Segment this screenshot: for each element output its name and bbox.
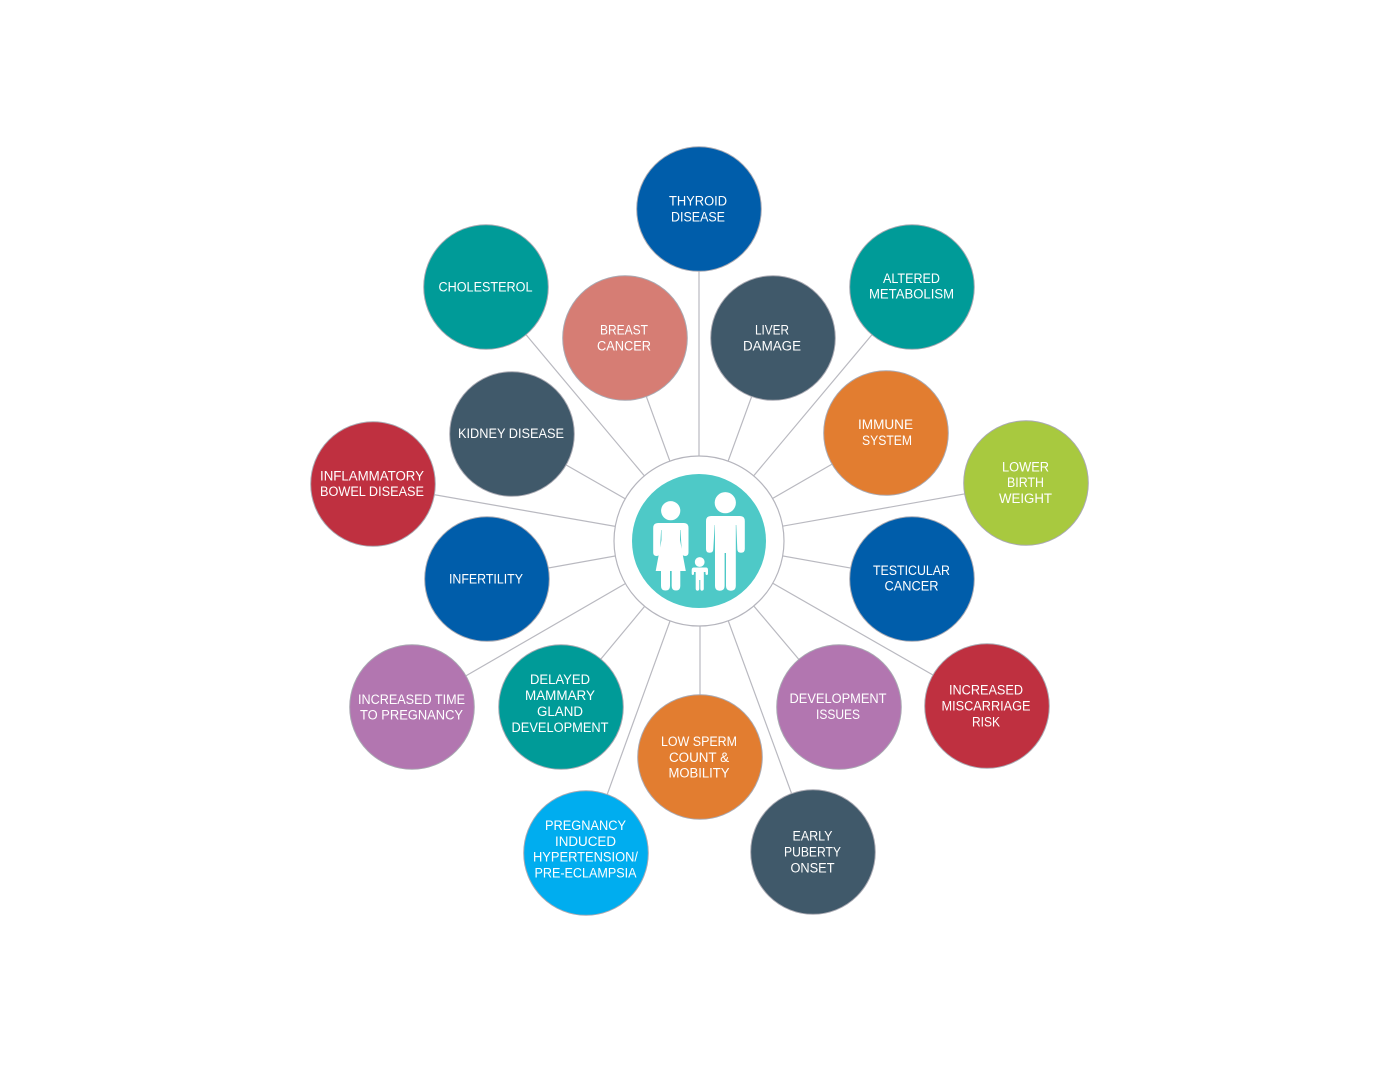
node: altered metabolism bbox=[850, 225, 974, 349]
node: increased miscarriage risk: MISCARRIAGE bbox=[942, 698, 1030, 714]
node: increased miscarriage risk: INCREASED bbox=[949, 682, 1023, 698]
node: delayed mammary gland development: GLAND bbox=[537, 704, 583, 720]
node: inflammatory bowel disease: BOWEL DISEASE bbox=[320, 484, 424, 500]
node: delayed mammary gland development: DEVELOPMENT bbox=[512, 720, 609, 736]
node: pregnancy induced hypertension / pre-eclampsia: PRE-ECLAMPSIA bbox=[534, 866, 637, 882]
node: testicular cancer: TESTICULAR bbox=[873, 563, 950, 579]
node: breast cancer: BREAST bbox=[600, 322, 648, 338]
node: immune system: SYSTEM bbox=[862, 433, 912, 449]
node: increased time to pregnancy bbox=[350, 645, 474, 769]
node: thyroid disease: DISEASE bbox=[671, 210, 725, 226]
node: altered metabolism: METABOLISM bbox=[869, 286, 954, 302]
node: cholesterol: CHOLESTEROL bbox=[438, 280, 533, 296]
node: breast cancer bbox=[563, 276, 687, 400]
node: low sperm count and mobility: LOW SPERM bbox=[661, 734, 737, 750]
node: development issues bbox=[777, 645, 901, 769]
node: inflammatory bowel disease: INFLAMMATORY bbox=[320, 468, 424, 484]
node: pregnancy induced hypertension / pre-eclampsia bbox=[524, 791, 648, 915]
node: increased time to pregnancy: INCREASED TIME bbox=[358, 692, 465, 708]
icon: woman bbox=[653, 501, 688, 590]
connector lines bbox=[373, 209, 1026, 853]
node: early puberty onset: PUBERTY bbox=[784, 844, 841, 860]
node: cholesterol bbox=[424, 225, 548, 349]
node: development issues: DEVELOPMENT bbox=[790, 691, 887, 707]
node: kidney disease bbox=[450, 372, 574, 496]
node: infertility bbox=[425, 517, 549, 641]
central hub bbox=[614, 456, 784, 626]
node: pregnancy induced hypertension / pre-eclampsia: HYPERTENSION/ bbox=[533, 850, 638, 866]
node: inflammatory bowel disease bbox=[311, 422, 435, 546]
node: early puberty onset bbox=[751, 790, 875, 914]
node: liver damage: DAMAGE bbox=[743, 338, 801, 354]
node: breast cancer: CANCER bbox=[597, 338, 651, 354]
node: increased miscarriage risk: RISK bbox=[972, 714, 1000, 730]
node: early puberty onset: ONSET bbox=[790, 860, 835, 876]
node: delayed mammary gland development: DELAYED bbox=[530, 672, 590, 688]
node: liver damage bbox=[711, 276, 835, 400]
node: pregnancy induced hypertension / pre-eclampsia: INDUCED bbox=[555, 834, 616, 850]
node: testicular cancer bbox=[850, 517, 974, 641]
node: development issues: ISSUES bbox=[816, 707, 860, 723]
node: delayed mammary gland development: MAMMARY bbox=[525, 688, 595, 704]
icon: child bbox=[692, 557, 708, 591]
node: kidney disease: KIDNEY DISEASE bbox=[458, 426, 564, 442]
icon: man bbox=[706, 492, 745, 591]
node: increased time to pregnancy: TO PREGNANCY bbox=[360, 708, 463, 724]
node: testicular cancer: CANCER bbox=[884, 578, 938, 594]
node: lower birth weight: BIRTH bbox=[1007, 475, 1044, 491]
node: low sperm count and mobility: MOBILITY bbox=[668, 766, 730, 782]
node: increased miscarriage risk bbox=[925, 644, 1049, 768]
node: liver damage: LIVER bbox=[755, 322, 789, 338]
node: lower birth weight: WEIGHT bbox=[999, 491, 1052, 507]
node: infertility: INFERTILITY bbox=[449, 572, 523, 588]
node: delayed mammary gland development bbox=[499, 645, 623, 769]
node: immune system bbox=[824, 371, 948, 495]
node: pregnancy induced hypertension / pre-eclampsia: PREGNANCY bbox=[545, 818, 626, 834]
node: early puberty onset: EARLY bbox=[792, 828, 833, 844]
node: lower birth weight bbox=[964, 421, 1088, 545]
node: thyroid disease: THYROID bbox=[669, 194, 727, 210]
node: immune system: IMMUNE bbox=[858, 417, 913, 433]
node: lower birth weight: LOWER bbox=[1002, 460, 1049, 476]
node: thyroid disease bbox=[637, 147, 761, 271]
node: altered metabolism: ALTERED bbox=[883, 271, 940, 287]
node: low sperm count and mobility: COUNT & bbox=[669, 750, 730, 766]
node: low sperm count and mobility bbox=[638, 695, 762, 819]
